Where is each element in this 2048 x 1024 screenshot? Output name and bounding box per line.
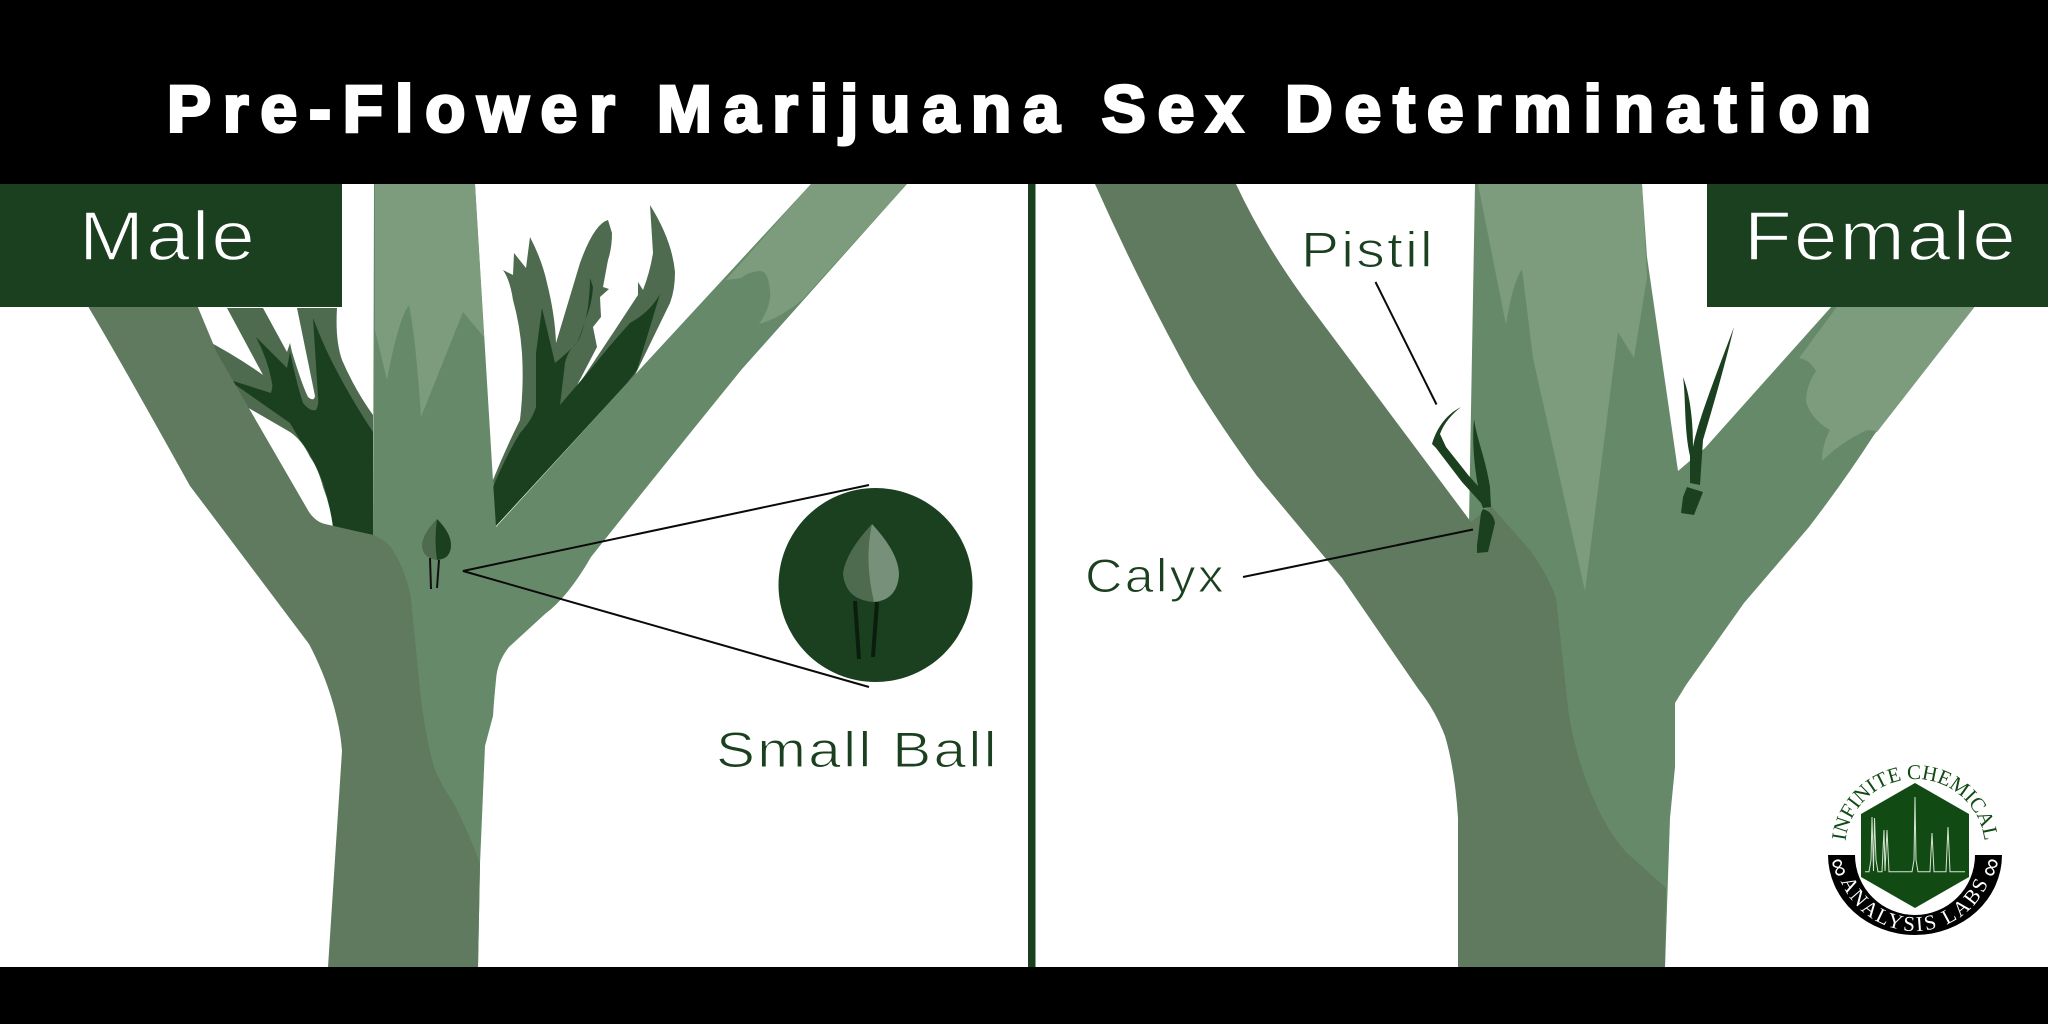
icon: left calyx [1477,509,1495,553]
logo chromatogram [1865,797,1965,872]
title: Pre-Flower Marijuana Sex Determination [167,72,1871,146]
logo left infinity mark: ∞ [1823,853,1857,881]
label: pistil: Pistil [1301,222,1435,278]
logo hexagon [1861,783,1969,908]
illustration: male left leaf [202,308,373,535]
illustration: light tip of male stem [375,184,484,417]
logo bottom text: ANALYSIS LABS [1840,878,1987,932]
icon: right calyx [1681,487,1703,515]
tab: female [1707,184,2048,307]
center divider [1028,184,1036,968]
illustration: light tip of female right branch [1799,300,1980,461]
label: calyx: Calyx [1085,549,1226,602]
header band [0,0,2048,184]
callout lines [463,485,869,687]
logo: Infinite Chemical Analysis Labs [1823,765,2007,935]
icon: right pistil [1683,327,1734,485]
logo right infinity mark: ∞ [1973,853,2007,881]
illustration: female centre stem and right branch [1469,184,2010,967]
logo band [1828,855,2002,935]
tab: male: Male [79,197,257,275]
illustration: male centre stem and right branch [373,184,907,967]
illustration: male left branch and trunk [60,240,480,967]
pointer line: calyx [1243,530,1473,577]
label: small ball: Small Ball [716,722,999,778]
footer band [0,967,2048,1024]
panel: female plant [1085,184,2010,967]
panel: male plant [60,184,999,967]
tab: male [0,184,342,307]
illustration: light tip of male right branch [726,184,907,324]
tab: female: Female [1744,197,2018,275]
pointer line: pistil [1376,282,1436,404]
illustration: male right leaf [493,205,675,527]
logo top text: INFINITE CHEMICAL [1832,765,1997,840]
icon: left pistil [1432,407,1491,508]
illustration: female left branch and trunk [1095,184,1666,967]
callout: magnified small ball [778,488,972,682]
icon: small pollen ball on stem [422,519,451,589]
illustration: light centre of female stem [1478,184,1647,591]
